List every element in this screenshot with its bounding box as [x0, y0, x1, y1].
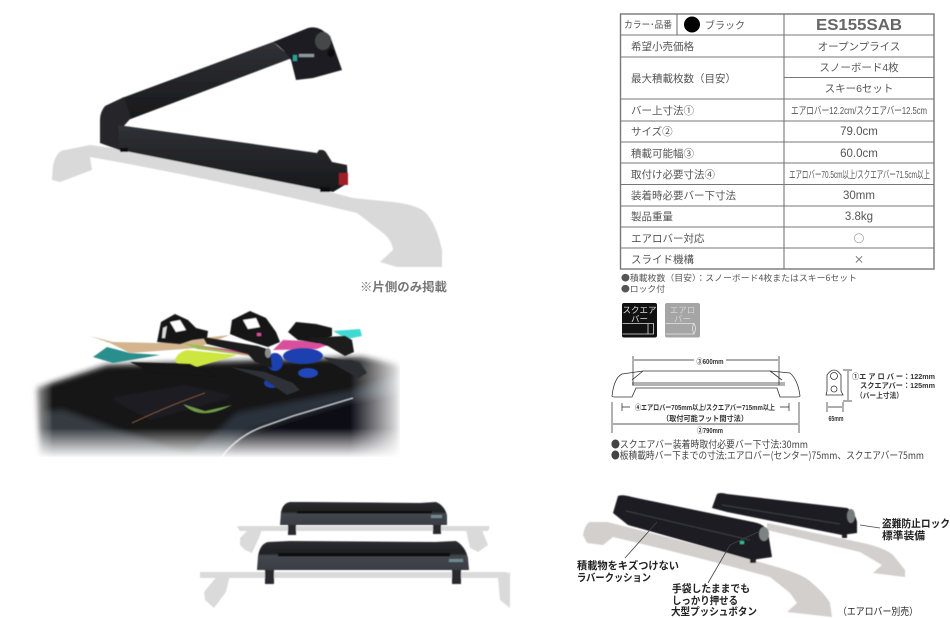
dimension diagram: front view: [612, 356, 800, 435]
705 715 mm dimension: [622, 403, 789, 411]
rear aero bar: [767, 523, 905, 577]
dimension notes: [611, 436, 924, 462]
row labels: サイズ②: [631, 125, 673, 138]
rear crossbar: [237, 526, 489, 553]
dimension diagram: side view: [826, 370, 935, 423]
600 mm label: ③600mm: [696, 357, 724, 366]
row labels: 積載可能幅③: [631, 147, 694, 160]
row values: ×: [854, 252, 864, 267]
carrier hinge: [100, 97, 131, 151]
photo: carriers mounted on aero bars: [583, 493, 905, 617]
row labels: バー上寸法①: [631, 104, 694, 117]
790 mm dimension: [612, 402, 799, 433]
icon: aero bar: [665, 303, 700, 338]
row labels: [631, 40, 736, 266]
row values: スノーボード4枚: [819, 61, 899, 74]
front aero bar: [583, 522, 832, 617]
row labels: 最大積載枚数（目安）: [631, 72, 736, 85]
row values: ○: [854, 231, 864, 246]
callout: rubber cushion: ラバークッション: [577, 572, 651, 584]
table footnotes: ●ロック付: [621, 283, 666, 295]
callout: rubber cushion: 積載物をキズつけない: [577, 559, 679, 572]
spec table: [620, 14, 934, 269]
row values: 30mm: [843, 190, 875, 202]
row labels: スライド機構: [631, 253, 694, 266]
row values: スキー6セット: [825, 83, 893, 95]
mounting foot spacing label: ④エアロバー705mm以上/スクエアバー715mm以上: [635, 402, 775, 412]
row labels: 製品重量: [631, 210, 673, 223]
callout: push button: しっかり押せる: [672, 594, 738, 607]
carrier feet: [120, 148, 330, 192]
carrier outline: [612, 371, 800, 397]
rear carrier: [280, 502, 447, 535]
callout: push button: [671, 532, 758, 618]
snowboards: [90, 329, 362, 388]
front carrier: [613, 495, 772, 563]
photo: snowboards loaded on car roof: [25, 311, 420, 479]
roof board reflection: [183, 404, 232, 413]
callout: push button: 大型プッシュボタン: [671, 605, 757, 618]
row labels: 取付け必要寸法④: [631, 168, 715, 181]
65 mm label: 65mm: [828, 414, 844, 423]
front crossbar: [200, 572, 510, 608]
red release latch: [339, 173, 348, 185]
row labels: 希望小売価格: [631, 40, 694, 53]
row labels: エアロバー対応: [631, 232, 705, 245]
color and part number row: ブラック: [705, 19, 745, 32]
callout: push button: 手袋したままでも: [672, 582, 750, 595]
carrier head with logo: [273, 27, 342, 80]
color and part number row: ES155SAB: [816, 17, 902, 34]
790 mm label: ②790mm: [697, 426, 723, 435]
icon: square bar: [622, 303, 657, 338]
600 mm dimension: [633, 356, 779, 385]
carrier upper arm: [122, 42, 292, 120]
row values: 79.0cm: [840, 126, 878, 138]
table footnotes: ●積載枚数（目安）：スノーボード4枚またはスキー6セット: [621, 272, 857, 284]
dimension notes: ●スクエアバー装着時取付必要バー下寸法:30mm: [611, 436, 808, 451]
callout: rubber cushion: [577, 522, 679, 584]
car window trim: [217, 398, 353, 463]
row values: [789, 41, 930, 267]
height and width dimensions: [827, 370, 852, 412]
row values: 3.8kg: [845, 211, 873, 223]
mounting foot spacing label: （取付可能フット間寸法）: [662, 413, 748, 423]
icon: aero bar: バー: [674, 314, 691, 324]
bar height label: [852, 372, 935, 400]
reflection line of board: [132, 393, 205, 423]
caption: one side only: ※片側のみ掲載: [360, 279, 447, 294]
callout: anti-theft lock: 標準装備: [882, 529, 926, 542]
row labels: 装着時必要バー下寸法: [631, 189, 736, 202]
bindings: [157, 311, 332, 347]
carrier lower arm: [118, 125, 348, 192]
photo: open ski carrier on crossbar: [52, 27, 442, 267]
bar height label: ①エ ア ロ バ ー：122mm: [852, 372, 935, 381]
front carrier: [257, 541, 469, 584]
table footnotes: [621, 272, 857, 295]
roof carriers: [130, 336, 367, 395]
edge fades: [25, 340, 420, 479]
color and part number row: [624, 16, 902, 34]
icon: aero bar: エアロ: [670, 305, 695, 315]
side profile: [826, 370, 843, 395]
row values: 60.0cm: [840, 148, 878, 160]
bar height label: （バー上寸法）: [856, 390, 903, 400]
car body: [36, 357, 400, 463]
bar height label: スクエアバー：125mm: [860, 380, 935, 390]
color and part number row: カラー･品番: [624, 19, 672, 31]
crossbar in grey: [52, 145, 442, 267]
mounting foot spacing label: [635, 402, 775, 423]
icon: square bar: バー: [631, 314, 648, 324]
row values: オープンプライス: [818, 41, 900, 53]
callout: anti-theft lock: [860, 517, 950, 542]
table grid: [620, 14, 934, 269]
note: aero bar sold separately: （エアロバー別売）: [838, 605, 918, 618]
rear carrier: [712, 493, 857, 538]
photo: two closed carriers front view: [200, 502, 510, 608]
icon: square bar: スクエア: [622, 305, 657, 315]
